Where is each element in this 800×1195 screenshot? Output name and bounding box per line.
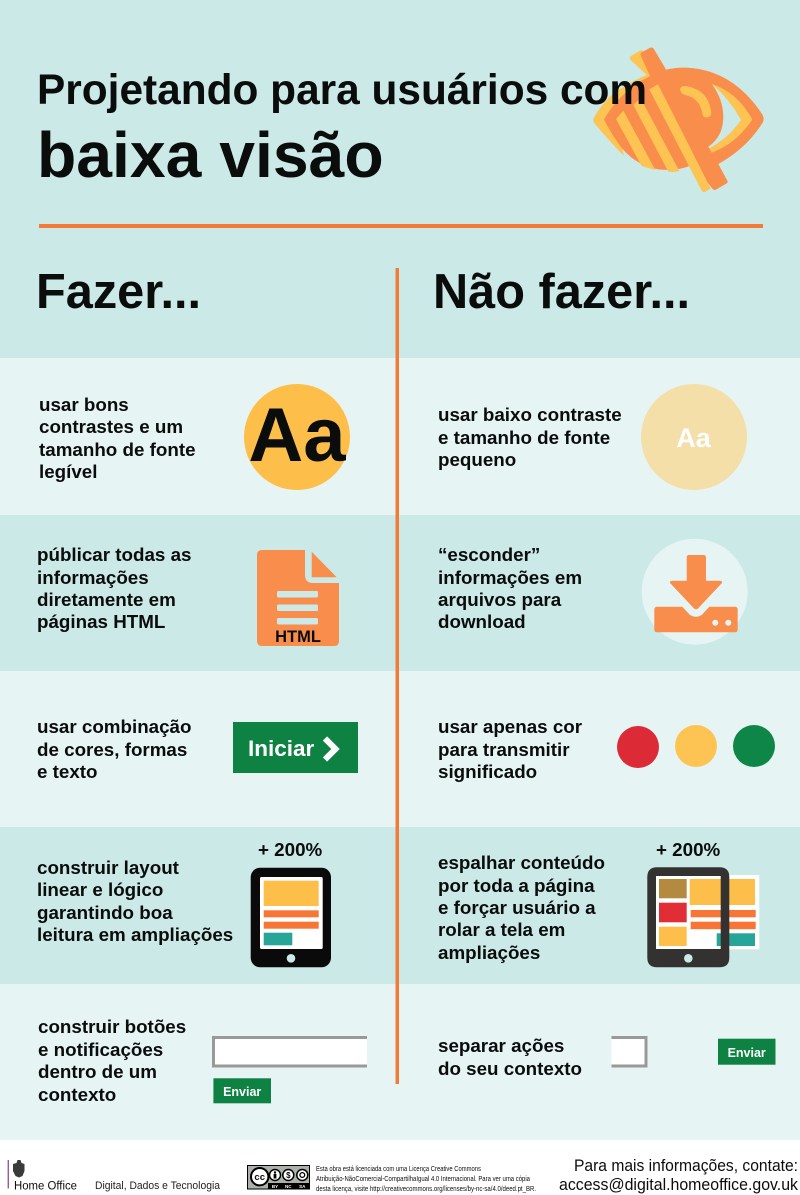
icon: low contrast Aa	[641, 384, 747, 490]
icon: creative commons badge: BY	[272, 1184, 278, 1189]
text: licence: Atribuição-NãoComercial-CompartilhaIgual 4.0 Internacional. Para ver uma cópia	[316, 1176, 530, 1183]
icon: creative commons badge: NC	[285, 1184, 292, 1189]
icon: low contrast Aa: Aa	[676, 423, 712, 453]
text: publish in html: diretamente em	[37, 589, 176, 610]
button: iniciar: Iniciar	[248, 736, 315, 761]
row 2: html	[0, 515, 800, 671]
label: plus 200 percent: + 200%	[258, 839, 323, 860]
centre divider	[396, 268, 399, 1084]
text: good contrast: tamanho de fonte	[39, 439, 196, 460]
row 4: layout	[0, 827, 800, 984]
button: enviar right	[718, 1039, 776, 1065]
text: scattered content: espalhar conteúdo	[438, 852, 605, 873]
text: hide in downloads: arquivos para	[438, 589, 562, 610]
button: iniciar	[233, 722, 358, 773]
icon: html document	[257, 550, 339, 646]
icon: download	[642, 539, 748, 645]
logo: home office: Home Office	[14, 1178, 77, 1192]
icon: three colour dots	[617, 725, 775, 768]
icon: tablet linear layout	[251, 868, 331, 967]
text: colour only: significado	[438, 761, 537, 782]
text: scattered content: rolar a tela em	[438, 919, 565, 940]
text: scattered content: por toda a página	[438, 875, 595, 896]
icon: creative commons badge: SA	[299, 1184, 306, 1189]
text: buttons in context: contexto	[38, 1084, 116, 1105]
icon: crossed out eye	[593, 47, 764, 192]
icon: tablet with overflowing layout	[647, 867, 759, 967]
title: baixa visão	[37, 119, 384, 191]
header panel	[0, 0, 800, 358]
text: linear layout: leitura em ampliações	[37, 924, 233, 945]
footer	[8, 1156, 798, 1194]
icon: creative commons badge: cc	[254, 1172, 265, 1183]
text: good contrast: contrastes e um	[39, 416, 183, 437]
text: department: Digital, Dados e Tecnologia	[95, 1180, 221, 1192]
text: linear layout: linear e lógico	[37, 879, 163, 900]
logo: home office	[8, 1160, 77, 1192]
button: enviar left: Enviar	[223, 1085, 261, 1099]
text: colours shapes text: de cores, formas	[37, 739, 187, 760]
heading: do: Fazer...	[36, 265, 201, 319]
text: good contrast: legível	[39, 461, 97, 482]
text: low contrast: usar baixo contraste	[438, 404, 622, 425]
title: Projetando para usuários com	[37, 66, 647, 113]
text: colours shapes text: usar combinação	[37, 716, 191, 737]
text: licence: desta licença, visite http://creativecommons.org/licenses/by-nc-sa/4.0/deed.pt_BR.	[316, 1186, 536, 1193]
text: colours shapes text: e texto	[37, 761, 98, 782]
form input cut off	[612, 1036, 648, 1068]
text: buttons in context: e notificações	[38, 1039, 163, 1060]
text: publish in html: públicar todas as	[37, 544, 191, 565]
text: buttons in context: dentro de um	[38, 1061, 157, 1082]
heading: don't: Não fazer...	[433, 265, 690, 319]
text: separate actions: separar ações	[438, 1035, 564, 1056]
icon: html document: HTML	[275, 628, 321, 646]
row 3: colour	[0, 671, 800, 827]
text: publish in html: informações	[37, 567, 149, 588]
button: enviar left	[213, 1078, 271, 1103]
row 5: forms	[0, 984, 800, 1140]
icon: creative commons badge: $	[286, 1171, 291, 1180]
label: plus 200 percent right: + 200%	[656, 839, 721, 860]
text: licence: Esta obra está licenciada com uma Licença Creative Commons	[316, 1166, 481, 1173]
text: hide in downloads: download	[438, 611, 526, 632]
text: separate actions: do seu contexto	[438, 1058, 582, 1079]
icon: high contrast Aa: Aa	[248, 393, 346, 478]
text: colour only: usar apenas cor	[438, 716, 583, 737]
text: low contrast: pequeno	[438, 449, 516, 470]
text: buttons in context: construir botões	[38, 1016, 186, 1037]
text: publish in html: páginas HTML	[37, 611, 165, 632]
text: linear layout: garantindo boa	[37, 902, 173, 923]
button: enviar right: Enviar	[728, 1046, 766, 1060]
text: hide in downloads: informações em	[438, 567, 582, 588]
form input	[212, 1036, 367, 1068]
text: colour only: para transmitir	[438, 739, 570, 760]
text: linear layout: construir layout	[37, 857, 180, 878]
icon: creative commons badge	[247, 1165, 310, 1190]
text: good contrast: usar bons	[39, 394, 129, 415]
text: low contrast: e tamanho de fonte	[438, 427, 610, 448]
text: scattered content: ampliações	[438, 942, 540, 963]
text: hide in downloads: “esconder”	[438, 544, 540, 565]
text: scattered content: e forçar usuário a	[438, 897, 596, 918]
row 1: contrast	[0, 358, 800, 515]
